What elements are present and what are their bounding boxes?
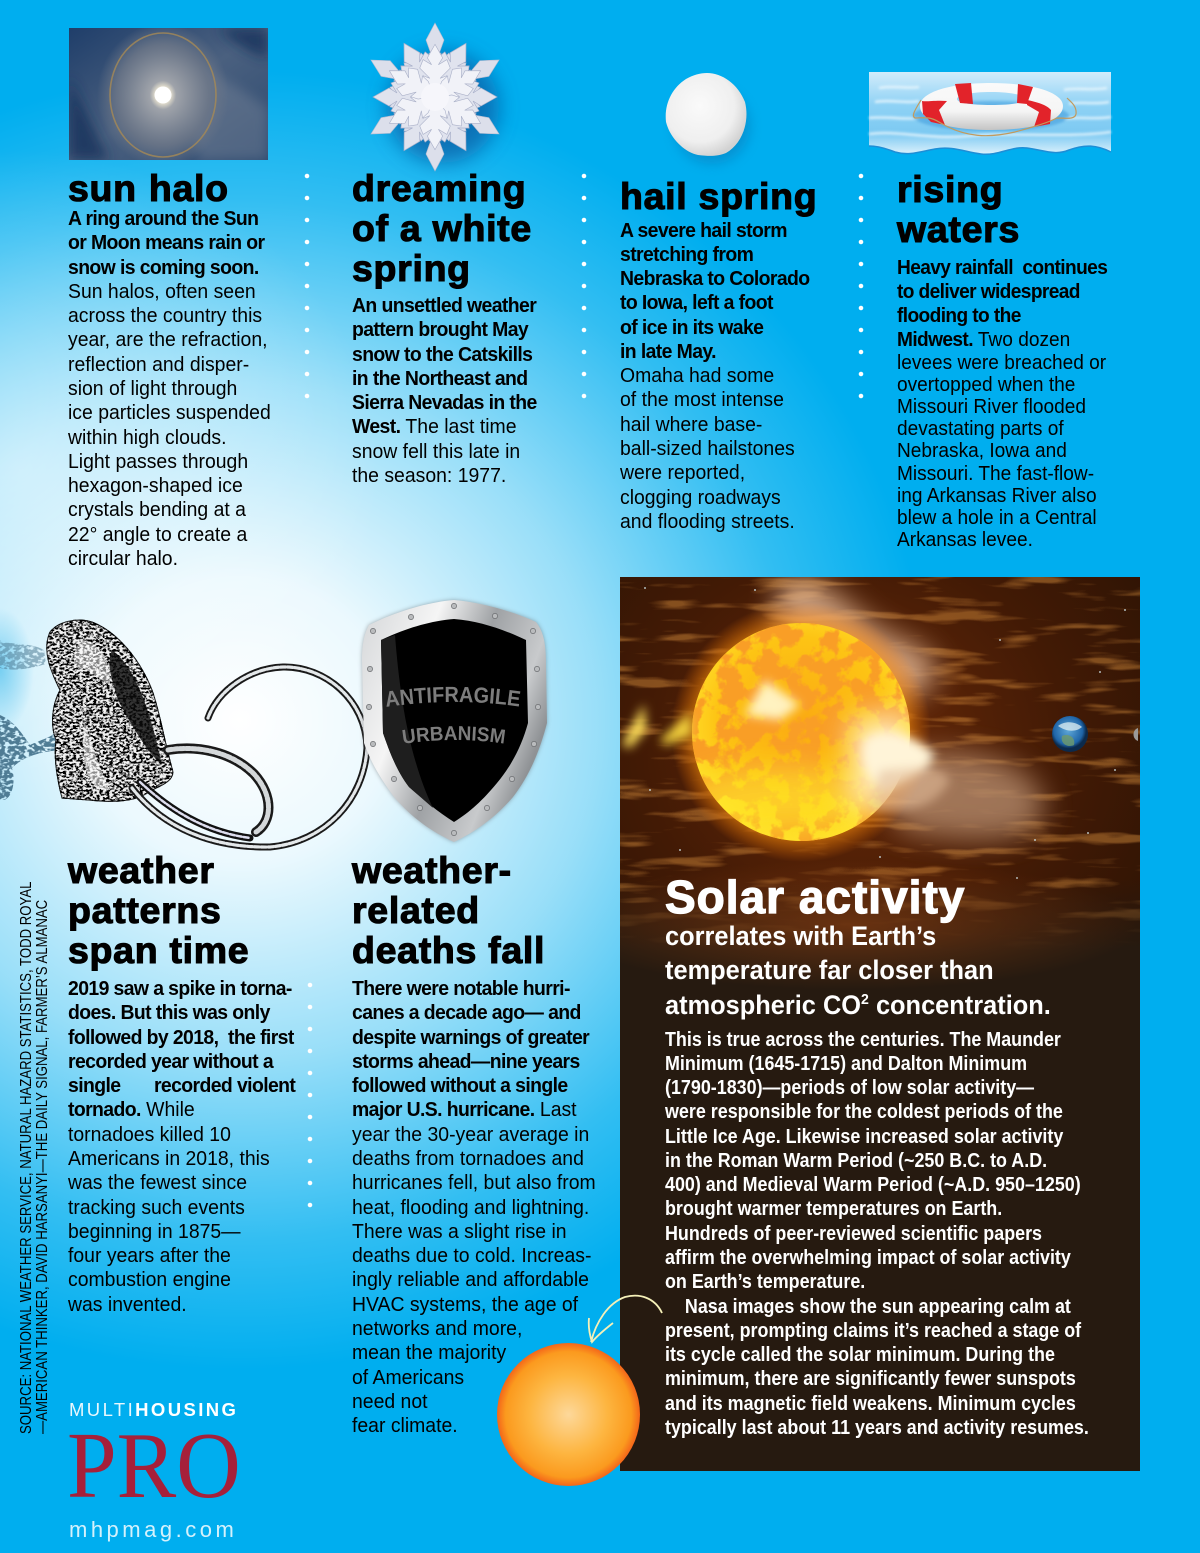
text: sun halo body: within high clouds. [68, 427, 227, 449]
text: solar activity body: were responsible for the coldest periods of the [665, 1101, 1063, 1123]
text: hail spring body: were reported, [620, 462, 745, 484]
text: solar activity body: (1790-1830)—periods of low solar activity— [665, 1077, 1034, 1099]
text: deaths fall body: There was a slight rise in [352, 1221, 567, 1243]
text: solar activity body: brought warmer temperatures on Earth. [665, 1198, 1002, 1220]
heading: weather patterns span time: patterns [68, 889, 222, 931]
text: weather patterns body: tornadoes killed 10 [68, 1124, 231, 1146]
text: source credit: SOURCE: NATIONAL WEATHER SERVICE, NATURAL HAZARD STATISTICS, TODD ROYAL [18, 882, 35, 1434]
text: deaths fall body: heat, flooding and lightning. [352, 1197, 589, 1219]
image: life ring on water [867, 72, 1113, 155]
text: solar activity body: This is true across the centuries. The Maunder [665, 1028, 1061, 1050]
heading: sun halo: sun halo [68, 167, 229, 209]
text: solar activity body: and its magnetic field weakens. Minimum cycles [665, 1393, 1076, 1415]
text: deaths fall body: despite warnings of greater [352, 1027, 589, 1049]
text: weather patterns body: followed by 2018, the first [68, 1027, 294, 1049]
text: sun halo body: A ring around the Sun [68, 208, 258, 230]
text: weather patterns body: does. But this was only [68, 1002, 270, 1024]
text: deaths fall body: There were notable hurri- [352, 978, 570, 1000]
text: deaths fall body: deaths due to cold. Increas- [352, 1245, 591, 1267]
text: deaths fall body: ingly reliable and affordable [352, 1269, 589, 1291]
text: solar activity body: affirm the overwhelming impact of solar activity [665, 1247, 1071, 1269]
text: sun halo body: circular halo. [68, 548, 178, 570]
text: source credit: —AMERICAN THINKER, DAVID HARSANYI—THE DAILY SIGNAL, FARMER’S ALMANAC [34, 900, 51, 1434]
heading: rising waters: rising [897, 168, 1003, 210]
text: solar activity body: Minimum (1645-1715) and Dalton Minimum [665, 1053, 1027, 1075]
text: hail spring body: and flooding streets. [620, 511, 795, 533]
text: solar activity body: its cycle called the solar minimum. During the [665, 1344, 1055, 1366]
text: hail spring body: hail where base- [620, 414, 762, 436]
heading: weather patterns span time: span time [68, 929, 249, 971]
icon: shield reading Antifragile Urbanism [360, 598, 550, 844]
text: weather patterns body: beginning in 1875— [68, 1221, 241, 1243]
icon: small orange sun [497, 1343, 640, 1486]
heading: weather patterns span time [67, 848, 249, 971]
text: hail spring body: Omaha had some [620, 365, 774, 387]
text: solar activity body: typically last about 11 years and activity resumes. [665, 1417, 1089, 1439]
text: rising waters body: Arkansas levee. [897, 529, 1033, 551]
text: rising waters body: Nebraska, Iowa and [897, 440, 1067, 462]
logo text: multihousing: MULTIHOUSING [69, 1399, 238, 1420]
subheading: solar correlation [665, 920, 1051, 1020]
text: white spring body: snow fell this late in [352, 441, 520, 463]
icon: hailstone [666, 73, 753, 167]
text: sun halo body [68, 208, 271, 570]
text: hail spring body: of ice in its wake [620, 317, 763, 339]
text: source credit [18, 882, 51, 1434]
text: rising waters body: Midwest. Two dozen [897, 329, 1070, 351]
text: deaths fall body [352, 978, 596, 1437]
text: deaths fall body: fear climate. [352, 1415, 458, 1437]
text: white spring body: West. The last time [352, 416, 516, 438]
text: rising waters body: Missouri River flooded [897, 396, 1086, 418]
text: solar activity body: in the Roman Warm Period (~250 B.C. to A.D. [665, 1150, 1047, 1172]
text: deaths fall body: of Americans [352, 1366, 464, 1388]
text: hail spring body: Nebraska to Colorado [620, 268, 810, 290]
image: sun halo photo [69, 28, 268, 160]
text: deaths fall body: HVAC systems, the age of [352, 1294, 578, 1316]
text: sun halo body: hexagon-shaped ice [68, 475, 243, 497]
text: sun halo body: sion of light through [68, 378, 237, 400]
text: weather patterns body: was the fewest since [68, 1172, 247, 1194]
heading: dreaming of a white spring: of a white [352, 207, 532, 249]
text: weather patterns body: combustion engine [68, 1269, 231, 1291]
icon: paper snowflake [370, 22, 509, 174]
text: solar activity body: minimum, there are significantly fewer sunspots [665, 1368, 1076, 1390]
text: deaths fall body: followed without a single [352, 1075, 568, 1097]
text: weather patterns body: tornado. While [68, 1099, 195, 1121]
text: rising waters body: devastating parts of [897, 418, 1064, 440]
text: solar activity body [665, 1028, 1089, 1439]
text: sun halo body: reflection and disper- [68, 354, 249, 376]
text: solar activity body: on Earth’s temperature. [665, 1271, 865, 1293]
text: white spring body: the season: 1977. [352, 465, 506, 487]
text: white spring body: in the Northeast and [352, 368, 528, 390]
icon: shield reading Antifragile Urbanism: ANTIFRAGILE [386, 686, 520, 707]
heading: rising waters: waters [897, 208, 1020, 250]
text: deaths fall body: major U.S. hurricane. Last [352, 1099, 577, 1121]
text: sun halo body: snow is coming soon. [68, 257, 259, 279]
text: sun halo body: Sun halos, often seen [68, 281, 256, 303]
text: weather patterns body: Americans in 2018, this [68, 1148, 270, 1170]
heading: hail spring: hail spring [620, 175, 817, 217]
text: deaths fall body: storms ahead—nine years [352, 1051, 580, 1073]
text: deaths fall body: deaths from tornadoes and [352, 1148, 584, 1170]
heading: weather-related deaths fall: weather- [352, 848, 512, 890]
text: rising waters body: ing Arkansas River also [897, 485, 1097, 507]
text: hail spring body: ball-sized hailstones [620, 438, 795, 460]
text: deaths fall body: year the 30-year average in [352, 1124, 589, 1146]
text: deaths fall body: hurricanes fell, but also from [352, 1172, 596, 1194]
subheading: solar correlation: correlates with Earth’s [665, 920, 936, 950]
text: weather patterns body: four years after the [68, 1245, 231, 1267]
text: sun halo body: 22° angle to create a [68, 524, 247, 546]
text: rising waters body: Missouri. The fast-flow- [897, 463, 1094, 485]
text: sun halo body: or Moon means rain or [68, 232, 265, 254]
heading: solar activity: Solar activity [665, 871, 965, 923]
heading: dreaming of a white spring: dreaming [352, 167, 526, 209]
heading: weather-related deaths fall: related [352, 889, 480, 931]
heading: weather patterns span time: weather [68, 848, 215, 890]
text: rising waters body: Heavy rainfall continues [897, 256, 1107, 278]
text: weather patterns body [68, 978, 296, 1316]
heading: dreaming of a white spring: spring [352, 247, 471, 289]
text: sun halo body: crystals bending at a [68, 499, 246, 521]
text: white spring body: Sierra Nevadas in the [352, 392, 537, 414]
text: solar activity body: Little Ice Age. Likewise increased solar activity [665, 1126, 1063, 1148]
text: solar activity body: present, prompting claims it’s reached a stage of [665, 1320, 1081, 1342]
heading: weather-related deaths fall: deaths fall [352, 929, 545, 971]
text: solar activity body: 400) and Medieval Warm Period (~A.D. 950–1250) [665, 1174, 1081, 1196]
heading: weather-related deaths fall [351, 848, 545, 971]
image: solar flare with Earth [620, 577, 1140, 982]
text: weather patterns body: single recorded violent [68, 1075, 295, 1097]
text: rising waters body: levees were breached or [897, 352, 1106, 374]
text: weather patterns body: was invented. [68, 1294, 187, 1316]
subheading: solar correlation: atmospheric CO2 concentration. [665, 990, 1051, 1020]
text: rising waters body: blew a hole in a Central [897, 507, 1097, 529]
heading: rising waters [896, 168, 1020, 250]
panel: solar activity [620, 577, 1140, 1471]
arrow: curved arrow to small sun [588, 1294, 663, 1344]
text: deaths fall body: need not [352, 1391, 428, 1413]
text: white spring body: pattern brought May [352, 319, 528, 341]
text: weather patterns body: tracking such events [68, 1197, 245, 1219]
logo text: website: mhpmag.com [69, 1517, 237, 1542]
text: deaths fall body: networks and more, [352, 1318, 522, 1340]
logo: Multihousing Pro [67, 1399, 241, 1542]
text: white spring body: An unsettled weather [352, 295, 536, 317]
logo text: PRO: PRO [67, 1414, 241, 1518]
text: hail spring body: stretching from [620, 244, 753, 266]
text: sun halo body: Light passes through [68, 451, 248, 473]
subheading: solar correlation: temperature far closer than [665, 955, 994, 985]
text: sun halo body: ice particles suspended [68, 402, 271, 424]
text: sun halo body: year, are the refraction, [68, 329, 268, 351]
text: sun halo body: across the country this [68, 305, 262, 327]
text: hail spring body: to Iowa, left a foot [620, 292, 773, 314]
text: hail spring body: clogging roadways [620, 487, 781, 509]
text: hail spring body [620, 220, 810, 533]
text: white spring body [352, 295, 537, 487]
heading: dreaming of a white spring [352, 167, 532, 289]
text: hail spring body: A severe hail storm [620, 220, 787, 242]
illustration: woolly mammoth engraving [0, 620, 370, 850]
text: rising waters body: flooding to the [897, 305, 1021, 327]
icon: shield reading Antifragile Urbanism: URBANISM [402, 726, 506, 744]
text: deaths fall body: canes a decade ago— and [352, 1002, 581, 1024]
text: rising waters body: to deliver widespread [897, 281, 1080, 303]
text: hail spring body: of the most intense [620, 389, 784, 411]
text: deaths fall body: mean the majority [352, 1342, 506, 1364]
text: white spring body: snow to the Catskills [352, 344, 532, 366]
text: hail spring body: in late May. [620, 341, 716, 363]
text: weather patterns body: recorded year without a [68, 1051, 273, 1073]
text: rising waters body [897, 256, 1108, 551]
text: solar activity body: Nasa images show the sun appearing calm at [685, 1296, 1071, 1318]
text: weather patterns body: 2019 saw a spike in torna- [68, 978, 292, 1000]
text: rising waters body: overtopped when the [897, 374, 1075, 396]
text: solar activity body: Hundreds of peer-reviewed scientific papers [665, 1223, 1042, 1245]
